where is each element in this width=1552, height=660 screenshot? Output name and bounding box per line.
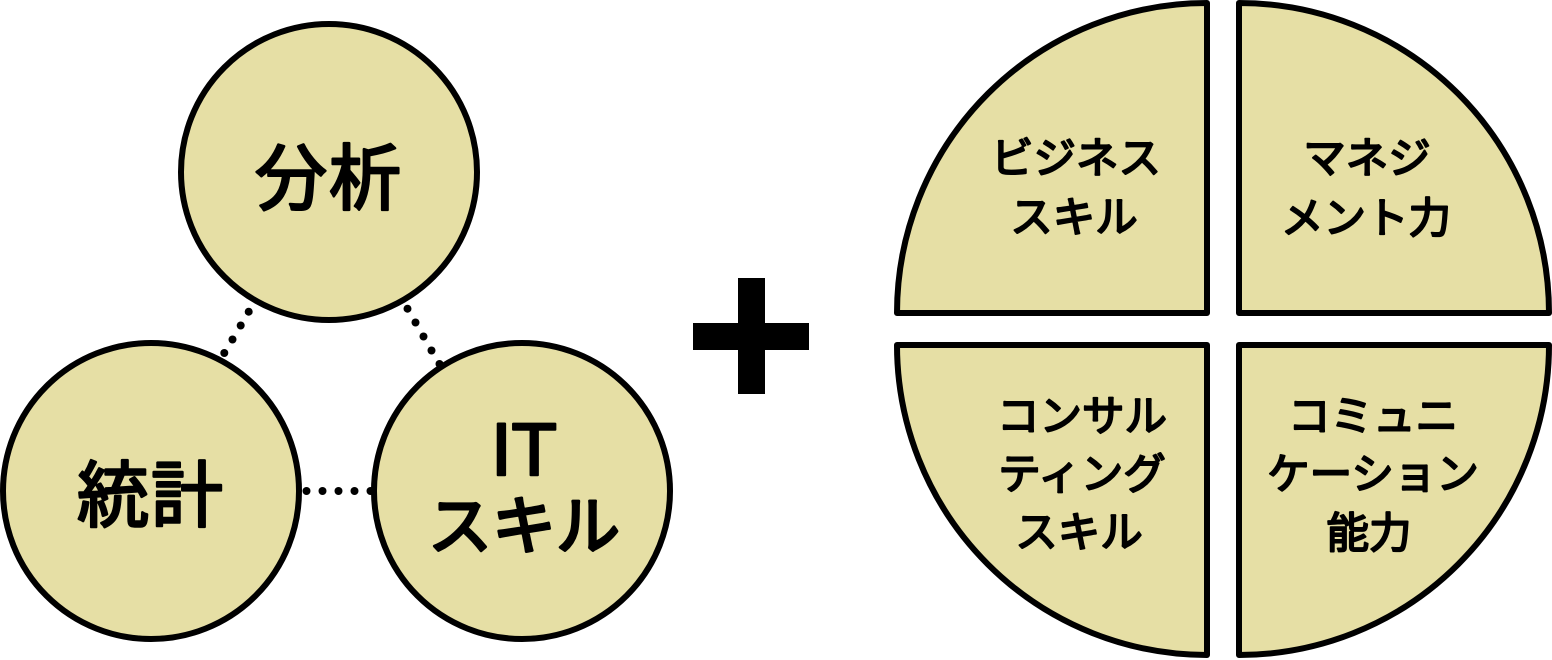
circle: IT skills: IT — [491, 408, 557, 491]
quadrant: communication ability — [1239, 345, 1549, 655]
quadrant: communication ability: ケーション — [1267, 452, 1479, 499]
quadrant: management ability — [1239, 3, 1549, 313]
quadrant: consulting skills: ティング — [998, 452, 1166, 499]
quadrant: consulting skills: スキル — [1015, 510, 1143, 557]
circle: IT skills — [374, 343, 670, 639]
quadrant: communication ability: コミュニ — [1288, 394, 1458, 441]
quadrant: management ability: メント力 — [1281, 196, 1451, 243]
quadrant: consulting skills: コンサル — [997, 394, 1167, 441]
quadrant: business skills: ビジネス — [991, 136, 1161, 183]
quadrant: business skills — [897, 3, 1207, 313]
quadrant: consulting skills — [897, 345, 1207, 655]
quadrant: communication ability: 能力 — [1326, 511, 1412, 558]
quadrant: business skills: スキル — [1010, 195, 1138, 242]
plus sign — [693, 278, 809, 394]
dotted connectors between circles — [220, 305, 444, 495]
circle: IT skills: スキル — [428, 491, 620, 563]
circle: statistics: 統計 — [77, 457, 225, 537]
circle: analysis — [181, 24, 477, 320]
circle: statistics — [3, 343, 299, 639]
quadrant: management ability: マネジ — [1303, 136, 1431, 183]
circle: analysis: 分析 — [255, 140, 403, 220]
